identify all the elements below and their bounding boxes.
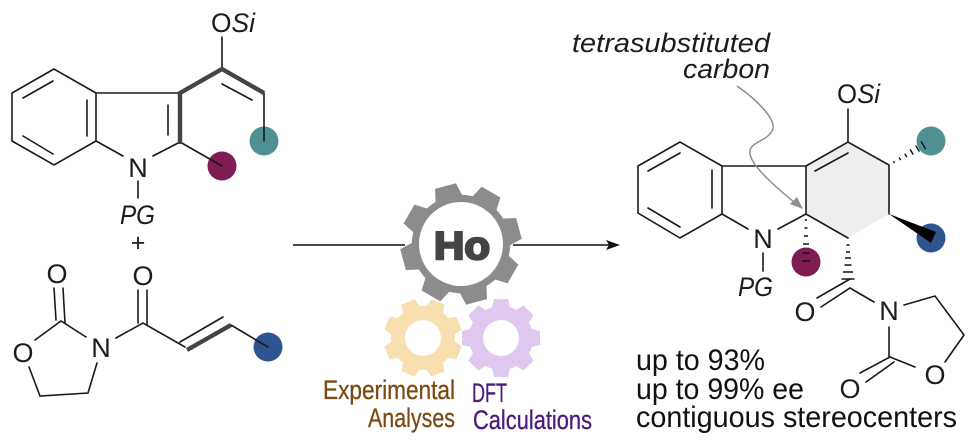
- oxazolidinone and enoyl bonds: [29, 288, 268, 396]
- shaded cyclohexene ring: [806, 142, 889, 238]
- callout: tetrasubstituted carbon: tetrasubstituted: [572, 28, 771, 58]
- gear: DFT calculations: [462, 299, 540, 377]
- results text: up to 93%: [636, 344, 765, 377]
- reaction arrow: [293, 240, 620, 250]
- label: ring O: O: [924, 360, 946, 390]
- label: PG: PG: [738, 272, 773, 302]
- results text: contiguous stereocenters: [636, 401, 957, 434]
- results text: [636, 344, 957, 434]
- hashed bond to maroon: [802, 220, 810, 261]
- label: Ho: Ho: [434, 225, 490, 268]
- label: experimental analyses: Analyses: [368, 403, 455, 433]
- hashed bond to teal: [894, 141, 926, 163]
- wedge bond to blue: [889, 214, 936, 243]
- substituent circle: blue: [254, 332, 282, 362]
- hashed bond to carbonyl: [842, 245, 854, 279]
- product: tetrahydrocarbazole: [638, 79, 964, 404]
- label: experimental analyses: [323, 375, 455, 433]
- label: N: N: [128, 153, 148, 183]
- substituent circle: maroon: [208, 152, 236, 180]
- callout: tetrasubstituted carbon: [572, 28, 771, 84]
- label: N: N: [753, 224, 773, 254]
- callout arrow: [737, 86, 803, 209]
- reactant: N-acyl oxazolidinone: [12, 259, 282, 396]
- indole skeleton bonds: [12, 37, 264, 198]
- substituent circle: maroon: [792, 248, 820, 276]
- label: DFT calculations: Calculations: [473, 405, 592, 435]
- label: acyl O: O: [132, 261, 154, 291]
- amide and oxazolidinone bonds: [817, 279, 964, 382]
- callout: tetrasubstituted carbon: carbon: [683, 54, 770, 84]
- label: DFT calculations: DFT: [472, 378, 507, 408]
- label: OSi: OSi: [837, 79, 881, 109]
- substituent circle: teal: [250, 126, 278, 156]
- thick alkene bond: [187, 325, 231, 350]
- skeleton bonds: [638, 109, 889, 271]
- results text: up to 99% ee: [636, 373, 804, 406]
- reactant: silyloxy vinyl indole: [12, 8, 278, 230]
- label: ring O: O: [12, 338, 34, 368]
- gear: holmium catalyst: [388, 171, 534, 317]
- gear: experimental analyses: [372, 287, 474, 389]
- label: PG: PG: [120, 200, 155, 230]
- label: experimental analyses: Experimental: [323, 375, 455, 405]
- label: OSi: OSi: [211, 8, 256, 38]
- label: DFT calculations: [472, 378, 592, 435]
- label: carbonyl O: O: [839, 374, 861, 404]
- thick reactive diene bonds: [180, 69, 264, 144]
- substituent circle: blue: [916, 224, 946, 252]
- label: amide O: O: [794, 297, 816, 327]
- label: N: N: [91, 333, 111, 363]
- plus sign: +: [131, 229, 145, 257]
- substituent circle: teal: [916, 126, 946, 156]
- label: imide N: N: [879, 296, 899, 326]
- label: carbonyl O: O: [46, 259, 68, 289]
